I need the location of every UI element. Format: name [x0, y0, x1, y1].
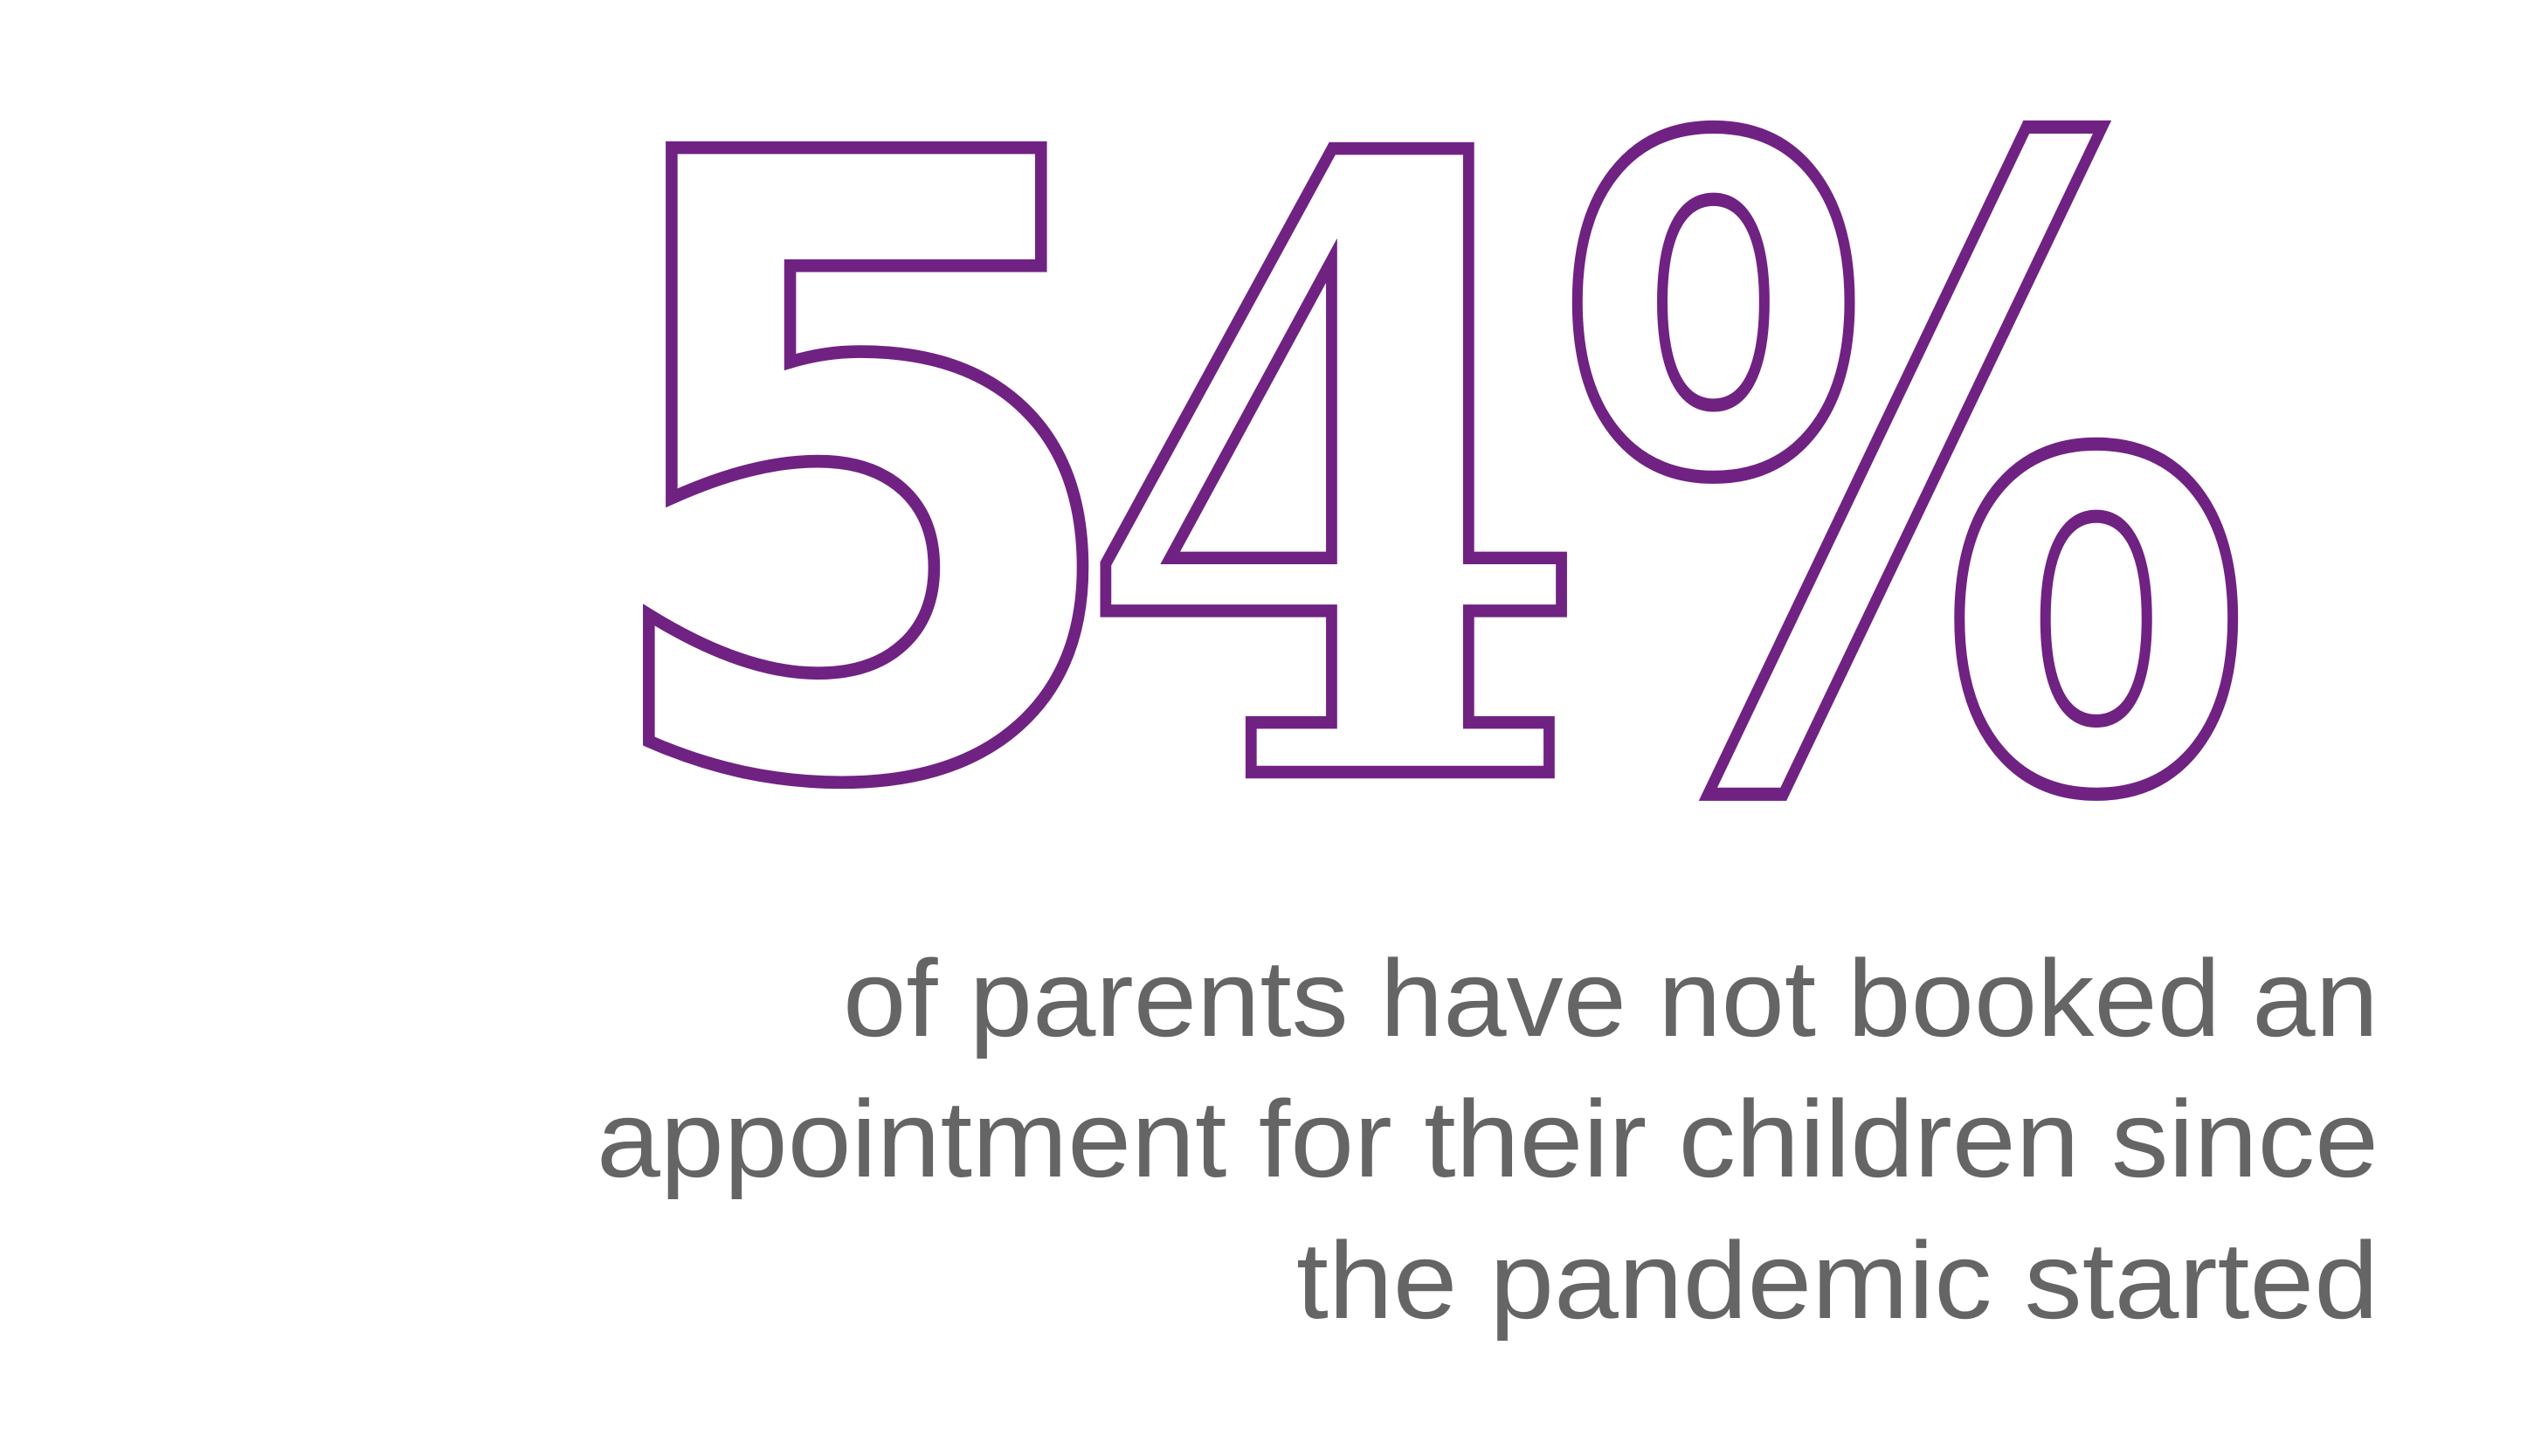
- caption text: [597, 938, 2379, 1342]
- statistic: 54% outlined numeral: 5: [588, 0, 1138, 972]
- statistic: 54% outlined numeral: [588, 0, 2255, 990]
- caption text: of parents have not booked an: [843, 938, 2379, 1059]
- caption text: appointment for their children since: [597, 1079, 2379, 1200]
- statistic: 54% outlined numeral: 4: [1075, 0, 1592, 971]
- caption text: the pandemic started: [1296, 1220, 2379, 1342]
